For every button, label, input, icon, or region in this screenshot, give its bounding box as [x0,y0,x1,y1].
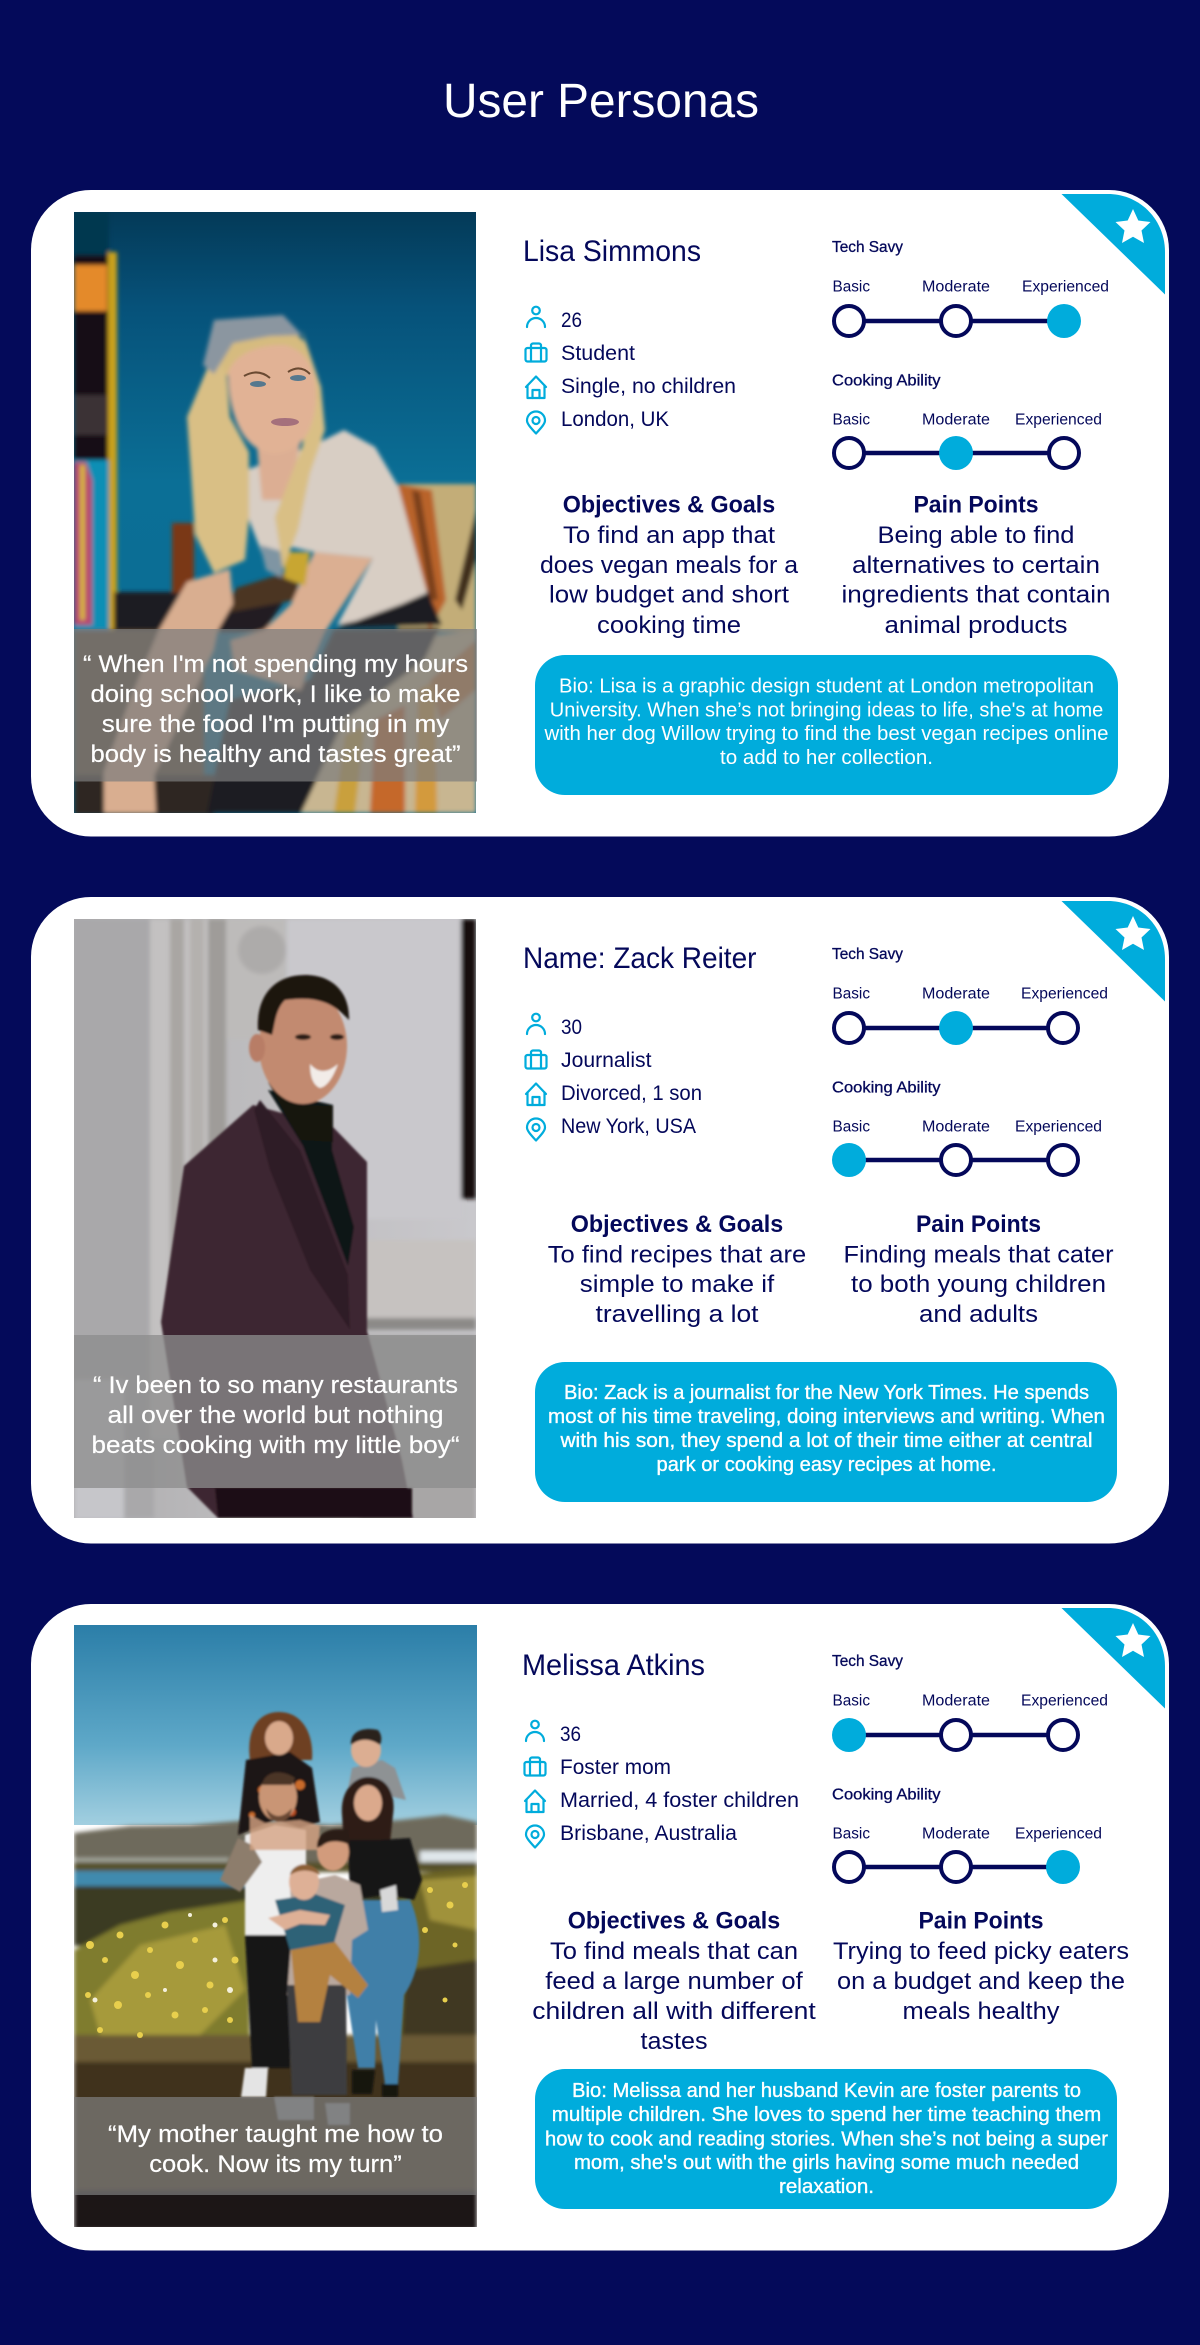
bio pill [535,655,1118,795]
slider: cooking ability, experienced: Experienced [1015,1826,1102,1842]
hair [187,352,249,573]
quote overlay [74,629,477,782]
panel: Lisa Simmons persona [31,190,1169,836]
objectives and goals: Objectives & Goals [563,492,775,518]
card background [31,190,1169,836]
persona name: Lisa Simmons [523,235,701,268]
slider: tech savvy, basic: Tech Savy [832,1653,903,1670]
slider: tech savvy, moderate: Experienced [1021,986,1108,1002]
objectives and goals: Objectives & Goals [568,1908,780,1934]
persona name: Name: Zack Reiter [523,942,756,975]
bio pill: to add to her collection. [720,747,933,769]
headband [203,315,302,374]
pain points [833,1908,1129,2025]
jeans and belt beside shirt [337,590,442,628]
demographics list with icons: London, UK [561,408,669,431]
objectives and goals: To find an app that [563,522,775,549]
panel: Zack Reiter persona [31,897,1169,1544]
demographics list with icons: Brisbane, Australia [560,1822,737,1845]
objectives and goals: tastes [640,2028,708,2055]
quote text: body is healthy and tastes great” [90,741,461,768]
demographics list with icons [524,1721,799,1848]
pain points: alternatives to certain [852,552,1100,579]
objectives and goals: does vegan meals for a [540,552,799,579]
slider: cooking ability, basic [832,1080,1102,1177]
demographics list with icons [526,1014,702,1140]
quote text [92,1372,460,1459]
slider: tech savvy, moderate [832,946,1108,1045]
slider: tech savvy, experienced: Basic [832,278,870,296]
bio pill: multiple children. She loves to spend her time teaching them [552,2104,1101,2126]
objectives and goals: To find meals that can [550,1938,798,1965]
neck [256,435,302,500]
objectives and goals: low budget and short [549,582,789,608]
slider: cooking ability, moderate: Basic [832,412,870,428]
demographics list with icons: Married, 4 foster children [560,1789,799,1812]
pain points: to both young children [851,1271,1106,1298]
jeans [207,628,440,813]
quote text [83,651,468,768]
quote text [108,2121,443,2178]
quote text: “My mother taught me how to [108,2121,443,2148]
demographics list with icons: 30 [561,1016,582,1039]
bio pill [535,1362,1117,1502]
pain points: animal products [884,612,1068,639]
pain points [842,492,1110,639]
quote overlay [74,2097,477,2195]
demographics list with icons [526,307,736,434]
corner ribbon with star [1062,901,1165,1002]
couch [398,484,476,632]
objectives and goals: Objectives & Goals [571,1211,783,1238]
pain points: Pain Points [918,1908,1044,1934]
slider: tech savvy, experienced [832,239,1109,338]
demographics list with icons: Foster mom [560,1756,671,1779]
objectives and goals [532,1908,816,2055]
card background [31,1604,1169,2250]
pain points: meals healthy [902,1998,1060,2025]
objectives and goals [548,1211,806,1328]
corner ribbon with star [1062,194,1165,294]
panel: Melissa Atkins persona [31,1604,1169,2250]
lower left floor and arm base [74,630,204,813]
bio pill: Bio: Zack is a journalist for the New York Times. He spends [564,1382,1089,1404]
slider: tech savvy, basic: Basic [832,1692,870,1710]
toddler [275,1894,345,1950]
objectives and goals: simple to make if [580,1271,775,1298]
slider: cooking ability, experienced: Moderate [922,1826,990,1842]
demographics list with icons: Divorced, 1 son [561,1082,702,1105]
slider: cooking ability, experienced [832,1786,1102,1884]
slider: cooking ability, moderate: Moderate [922,412,990,428]
quote text: all over the world but nothing [108,1402,444,1429]
objectives and goals: children all with different [532,1998,816,2025]
objectives and goals: cooking time [597,612,741,639]
woman [342,1777,394,1860]
slider: tech savvy, experienced: Moderate [922,278,990,296]
objectives and goals: To find recipes that are [548,1242,806,1268]
pain points: Being able to find [878,522,1074,549]
slider: cooking ability, basic: Experienced [1015,1118,1102,1136]
slider: cooking ability, experienced: Basic [832,1826,870,1842]
her left forearm [230,552,373,690]
photo: Lisa [74,212,476,815]
lower couch [300,630,476,813]
pain points: Finding meals that cater [844,1242,1114,1268]
objectives and goals: feed a large number of [545,1968,803,1995]
pain points: and adults [919,1301,1038,1328]
quote text: doing school work, I like to make [90,681,460,708]
bio pill: most of his time traveling, doing interviews and writing. When [548,1406,1105,1428]
bio pill: University. When she’s not bringing ideas to life, she's at home [550,700,1103,722]
slider: cooking ability, moderate: Experienced [1015,412,1102,428]
slider: cooking ability, moderate [832,372,1102,470]
slider: tech savvy, moderate: Tech Savy [832,946,903,963]
pain points: on a budget and keep the [837,1968,1125,1995]
slider: tech savvy, experienced: Tech Savy [832,239,903,256]
middle boy [287,1875,368,1995]
bio pill: Bio: Lisa is a graphic design student at London metropolitan [559,676,1094,698]
slider: cooking ability, experienced: Cooking Ability [832,1786,941,1804]
quote text: beats cooking with my little boy“ [92,1432,460,1459]
girl on shoulders [249,1712,312,1760]
quote text: “ Iv been to so many restaurants [93,1372,458,1399]
bio pill: relaxation. [779,2176,874,2198]
slider: tech savvy, moderate: Moderate [922,986,990,1002]
photo: Melissa and family [74,1625,477,2230]
shirt [249,430,427,625]
pain points: Trying to feed picky eaters [833,1938,1129,1965]
photo: Zack [74,919,476,1525]
bio pill: how to cook and reading stories. When she’s not being a super [545,2128,1108,2150]
pain points: Pain Points [916,1211,1041,1238]
title: User Personas [443,75,759,128]
slider: tech savvy, basic: Experienced [1021,1692,1108,1710]
pain points [844,1211,1114,1328]
pain points: ingredients that contain [842,582,1110,608]
objectives and goals [540,492,799,639]
pain points: Pain Points [914,492,1038,518]
quote text: cook. Now its my turn” [149,2151,402,2178]
slider: cooking ability, basic: Cooking Ability [832,1080,941,1096]
slider: tech savvy, experienced: Experienced [1022,278,1109,296]
slider: tech savvy, basic [832,1653,1108,1752]
bio pill: with his son, they spend a lot of their time either at central [559,1430,1092,1452]
quote overlay [74,1335,476,1488]
slider: cooking ability, basic: Basic [832,1118,870,1136]
quote text: sure the food I'm putting in my [102,711,449,738]
her right arm and hand [104,569,233,813]
slider: tech savvy, moderate: Basic [832,986,870,1002]
bio pill: mom, she's out with the girls having some much needed [574,2152,1079,2174]
slider: cooking ability, moderate: Cooking Ability [832,372,941,390]
face details [250,381,266,387]
slider: tech savvy, basic: Moderate [922,1692,990,1710]
face [228,345,316,454]
slider: cooking ability, basic: Moderate [922,1118,990,1136]
man [245,1825,306,1940]
bio pill: Bio: Melissa and her husband Kevin are foster parents to [572,2080,1081,2102]
demographics list with icons: Journalist [561,1049,652,1072]
flower specks [85,1882,468,2038]
corner ribbon with star [1062,1608,1165,1708]
objectives and goals: travelling a lot [596,1301,759,1328]
quote text: “ When I'm not spending my hours [83,651,468,678]
card background [31,897,1169,1544]
demographics list with icons: New York, USA [561,1115,696,1138]
demographics list with icons: 26 [561,309,582,332]
demographics list with icons: Student [561,342,635,365]
persona name: Melissa Atkins [522,1649,705,1682]
demographics list with icons: Single, no children [561,375,736,398]
demographics list with icons: 36 [560,1723,581,1746]
boy on shoulders [346,1760,406,1800]
bio pill: park or cooking easy recipes at home. [656,1454,996,1476]
bio pill: with her dog Willow trying to find the best vegan recipes online [543,723,1108,745]
bio pill [535,2069,1117,2209]
